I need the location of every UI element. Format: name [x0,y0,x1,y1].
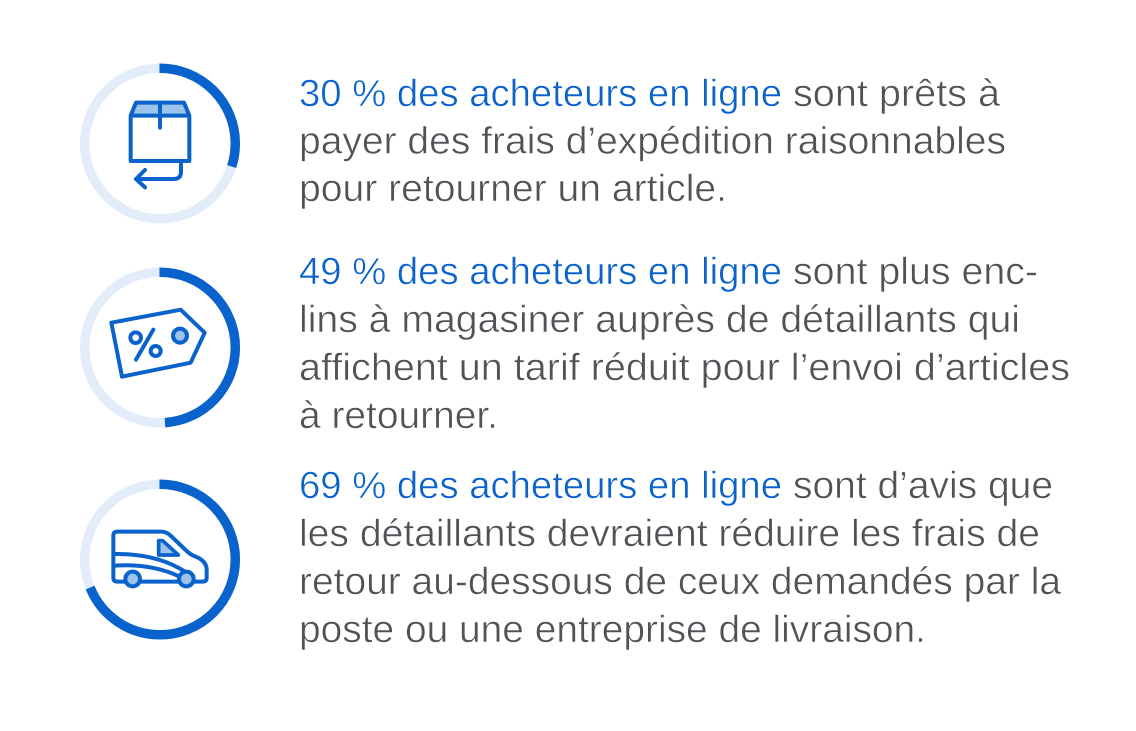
text block: 69 % [299,465,1062,651]
icon: percent price tag [111,310,205,377]
text block: 49 % [299,251,1070,437]
text block: 49 %: 49 % des acheteurs en ligne [299,251,782,293]
text block: 69 %: 69 % des acheteurs en ligne [299,465,782,507]
icon: box with return arrow [131,103,189,187]
text block: 69 %: poste ou une entreprise de livraison. [299,609,926,651]
donut chart: 69 % [85,484,235,635]
text block: 49 %: affichent un tarif réduit pour l’envoi d’articles [299,347,1070,389]
text block: 69 %: retour au-dessous de ceux demandés par la [299,561,1062,603]
text block: 30 %: 30 % des acheteurs en ligne [299,73,782,115]
text block: 49 %: lins à magasiner auprès de détaillants qui [299,299,1020,341]
text block: 69 %: les détaillants devraient réduire les frais de [299,513,1040,555]
text block: 30 %: sont prêts à [793,73,1001,115]
text block: 69 %: sont d’avis que [793,465,1053,507]
text block: 30 %: pour retourner un article. [299,168,727,210]
text block: 49 %: sont plus enc- [793,251,1038,293]
text block: 30 %: payer des frais d’expédition raisonnables [299,120,1006,162]
donut chart: 49 % [85,272,235,423]
donut chart: 30 % [85,68,235,219]
icon: delivery van [113,532,207,586]
text block: 49 %: à retourner. [299,395,498,437]
text block: 30 % [299,73,1006,210]
